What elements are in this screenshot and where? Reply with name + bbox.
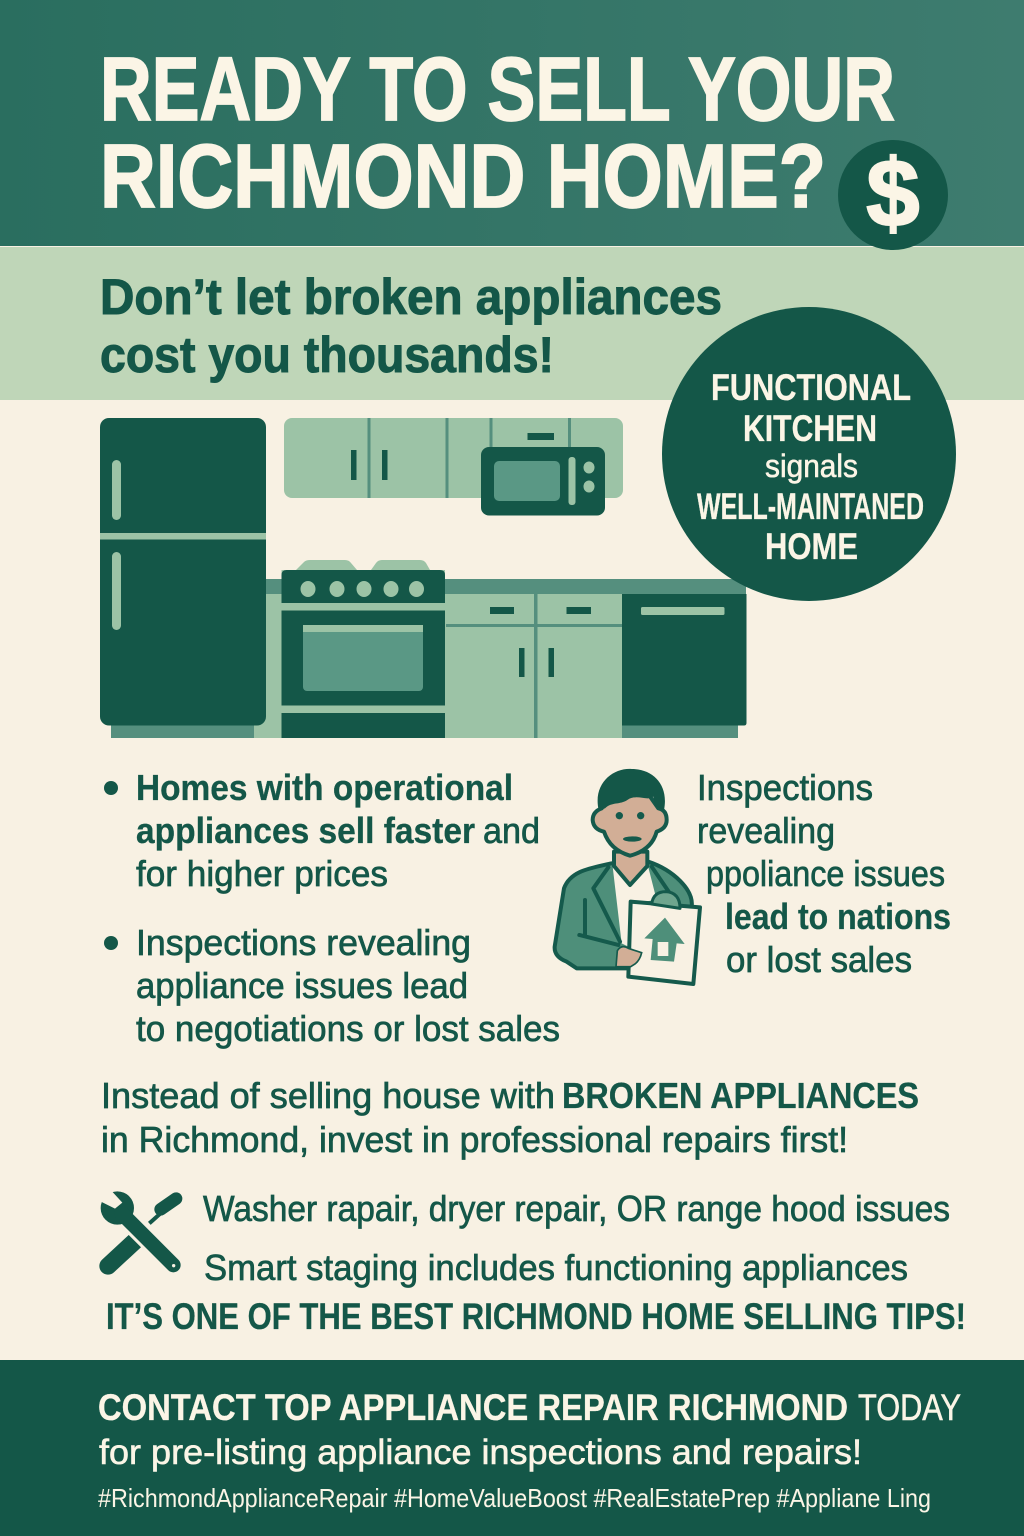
hashtags: #RichmondApplianceRepair #HomeValueBoost #RealEstatePrep #Appliane Ling <box>98 1483 931 1513</box>
illustration: kitchen <box>100 418 746 738</box>
callout: functional kitchen: signals <box>765 448 858 484</box>
shirt <box>613 867 657 947</box>
hair <box>598 769 665 810</box>
bullet: operational appliances <box>104 767 540 894</box>
upper cabinets <box>284 418 623 498</box>
lapels <box>579 867 677 945</box>
icon: dollar badge <box>838 140 948 250</box>
bullet: operational appliances: Homes with operational <box>136 767 513 808</box>
text: invest in repairs: BROKEN APPLIANCES <box>562 1075 919 1116</box>
call to action: for pre-listing appliance inspections and repairs! <box>99 1433 862 1472</box>
footer band <box>0 1360 1024 1536</box>
side text: inspections <box>697 767 951 980</box>
face <box>593 792 667 856</box>
bullet: operational appliances: and <box>483 810 540 851</box>
callout: functional kitchen: KITCHEN <box>743 408 877 449</box>
side text: inspections: Inspections <box>697 767 873 808</box>
microwave <box>481 447 605 516</box>
icon: wrench and screwdriver <box>97 1185 176 1267</box>
call to action: TODAY <box>858 1387 961 1428</box>
bullet: inspections: appliance issues lead <box>136 965 468 1006</box>
subheading band <box>0 247 1024 400</box>
subheading: cost you thousands! <box>100 327 554 383</box>
title: RICHMOND HOME? <box>100 127 826 227</box>
callout: functional kitchen: FUNCTIONAL <box>711 367 911 408</box>
callout: functional kitchen <box>662 307 956 601</box>
text: invest in repairs <box>101 1075 919 1160</box>
subheading <box>100 269 722 383</box>
bullet: inspections <box>104 922 560 1049</box>
header band <box>0 0 1024 246</box>
call to action <box>98 1387 961 1472</box>
text: repair list: Washer rapair, dryer repair, OR range hood issues <box>203 1188 950 1229</box>
side text: inspections: lead to nations <box>725 896 951 937</box>
icon: dollar badge: $ <box>866 140 920 247</box>
bullet: inspections: to negotiations or lost sales <box>136 1008 560 1049</box>
call to action: CONTACT TOP APPLIANCE REPAIR RICHMOND <box>98 1387 848 1428</box>
subheading: Don’t let broken appliances <box>100 269 722 325</box>
base cabinets <box>254 579 746 738</box>
text: invest in repairs: Instead of selling house with <box>101 1075 555 1116</box>
icon: inspector with clipboard <box>555 769 700 984</box>
refrigerator <box>100 418 266 738</box>
callout: functional kitchen: HOME <box>765 526 858 567</box>
bullet: inspections: Inspections revealing <box>136 922 471 963</box>
house <box>644 918 685 962</box>
neck <box>614 852 647 885</box>
range and oven <box>282 560 445 738</box>
side text: inspections: or lost sales <box>726 939 912 980</box>
jacket <box>555 862 692 968</box>
clipboard <box>628 902 700 984</box>
dishwasher <box>622 594 746 738</box>
bullet: operational appliances: appliances sell faster <box>136 810 475 851</box>
side text: inspections: ppoliance issues <box>706 853 945 894</box>
callout: functional kitchen: WELL-MAINTANED <box>697 486 924 527</box>
text: invest in repairs: in Richmond, invest in professional repairs first! <box>101 1119 848 1160</box>
hand <box>616 947 642 967</box>
title <box>100 40 895 227</box>
bullet: operational appliances: for higher prices <box>136 853 388 894</box>
text: repair list: Smart staging includes functioning appliances <box>204 1247 908 1288</box>
side text: inspections: revealing <box>697 810 835 851</box>
text: repair list <box>203 1188 950 1288</box>
